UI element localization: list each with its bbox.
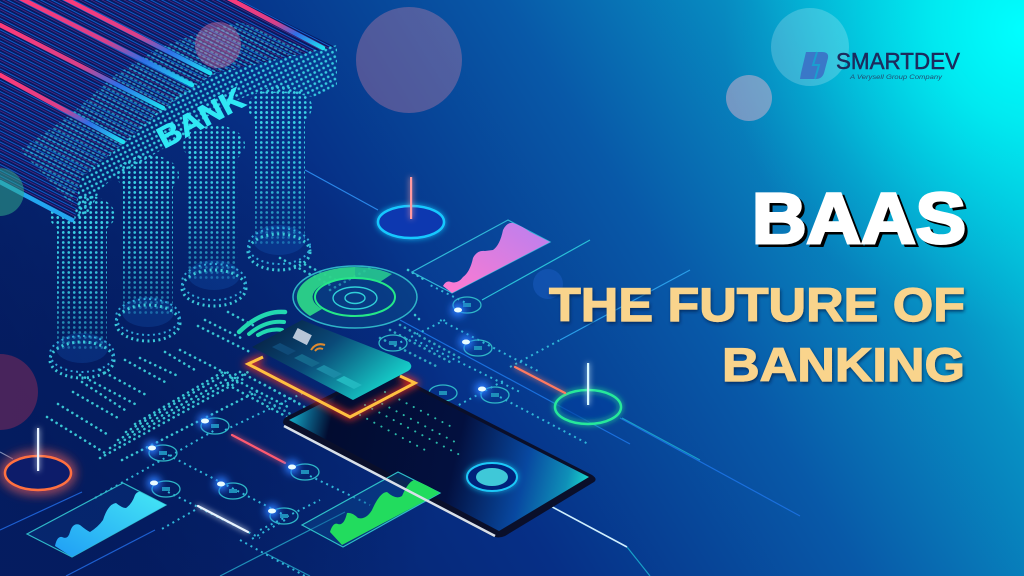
card chip	[293, 328, 312, 345]
smartphone	[283, 368, 596, 538]
title: BAAS: BAAS	[752, 180, 966, 259]
green radar circle	[293, 266, 417, 328]
wifi symbol	[239, 312, 285, 335]
card number blocks	[272, 343, 362, 389]
bank dot fields on the floor	[47, 258, 460, 460]
roof pediment arch	[74, 45, 337, 220]
subtitle: THE FUTURE OF BANKING: BANKING	[722, 338, 965, 391]
pink area chart	[412, 220, 550, 293]
blue area chart	[27, 483, 166, 557]
column 3	[182, 125, 246, 306]
column 4	[248, 86, 312, 270]
column 2	[116, 155, 180, 341]
fingerprint button	[467, 463, 517, 491]
logo mark cut	[813, 52, 819, 79]
glowing connector segments	[198, 367, 565, 532]
SmartDev logo	[800, 48, 961, 81]
red ring with white beam	[5, 428, 71, 490]
logo mark	[800, 52, 828, 79]
dotted stripes near roof front	[20, 22, 310, 205]
card contactless icon	[311, 344, 325, 351]
pink to cyan roof beams	[0, 0, 323, 220]
phone screen	[289, 372, 589, 531]
credit card	[252, 320, 411, 400]
title: BAAS: BAAS	[755, 182, 969, 262]
green area chart	[302, 472, 440, 547]
roof stripes	[0, 0, 335, 220]
BANK sign: BANK	[152, 82, 251, 155]
orange card frame	[248, 357, 415, 417]
node point halos	[145, 303, 489, 518]
subtitle: THE FUTURE OF BANKING	[549, 278, 965, 391]
phone screen dots	[360, 392, 460, 455]
bank building	[0, 0, 337, 378]
subtitle: THE FUTURE OF BANKING: THE FUTURE OF	[549, 278, 965, 331]
column 1	[49, 195, 115, 378]
green ring with white beam	[555, 363, 621, 424]
translucent decorative circles	[356, 7, 849, 299]
phone edge highlight	[284, 426, 495, 536]
pink, red and green overlay circles on bank	[0, 22, 241, 430]
node icons	[149, 297, 509, 524]
circuit network lines	[0, 170, 800, 576]
blue ring with pink beam	[378, 177, 444, 238]
logo wordmark: SMARTDEV	[836, 48, 961, 74]
glowing node points	[148, 308, 486, 514]
logo tagline: A Verysell Group Company	[849, 74, 943, 81]
